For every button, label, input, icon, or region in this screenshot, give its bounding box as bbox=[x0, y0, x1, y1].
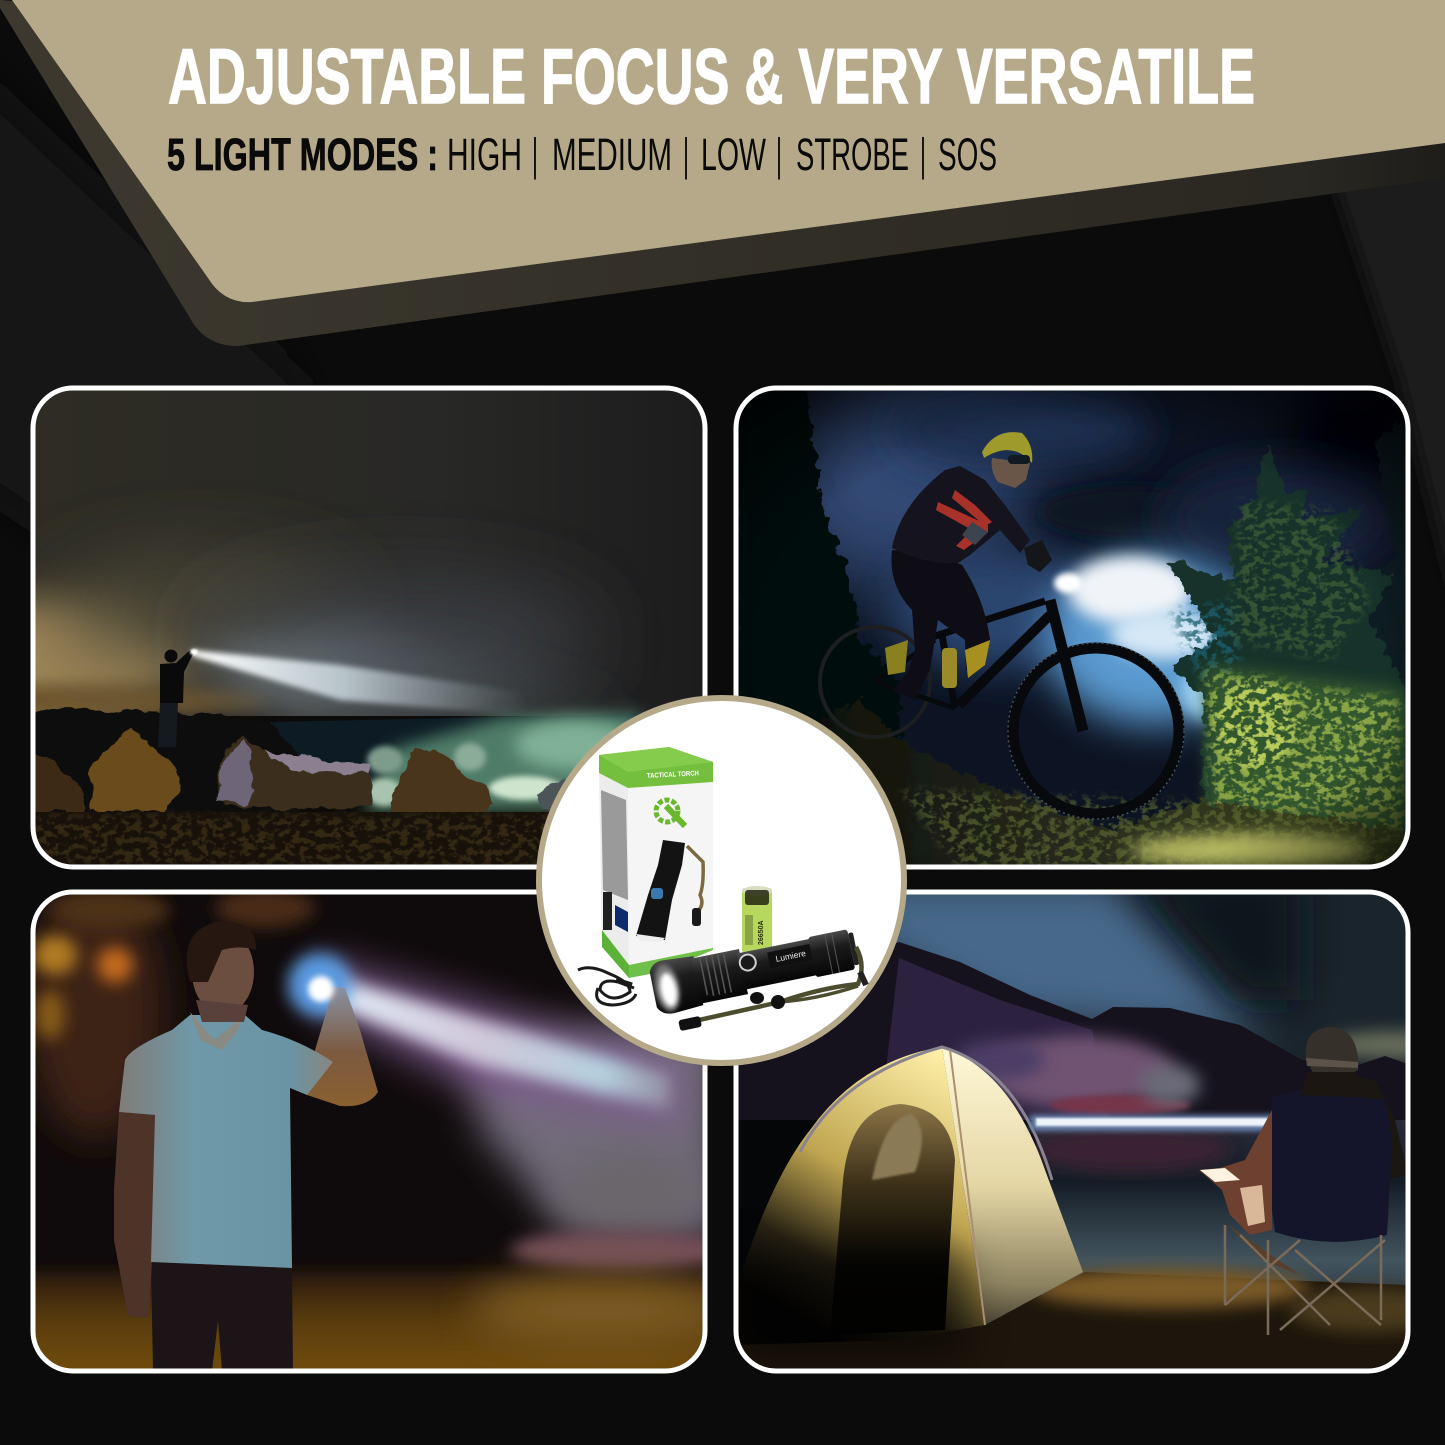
brand name: Lumiere bbox=[775, 948, 807, 964]
header shadow band bbox=[0, 0, 1445, 346]
box printed flashlight bbox=[636, 840, 703, 942]
lanyard bbox=[678, 947, 866, 1031]
panel: cyclist at dusk bbox=[736, 370, 1410, 867]
mode list: MEDIUM bbox=[552, 129, 672, 180]
box side text block bbox=[601, 790, 628, 932]
corner vignette bbox=[736, 388, 1408, 867]
subtitle: light modes: 5 LIGHT MODES : bbox=[167, 129, 438, 180]
mode list: SOS bbox=[938, 129, 997, 180]
sand bbox=[736, 1272, 1408, 1371]
treeline bbox=[36, 706, 298, 756]
right far tree bbox=[1368, 430, 1406, 680]
bright sky glow bbox=[1045, 555, 1265, 725]
fog and beam bbox=[288, 953, 720, 1240]
person in camping chair bbox=[1199, 1027, 1408, 1335]
center product circle bbox=[539, 698, 904, 1063]
bike light bbox=[1054, 573, 1082, 593]
battery: 26650A bbox=[758, 920, 765, 945]
mode list: HIGH bbox=[447, 129, 522, 180]
person silhouette bbox=[158, 650, 193, 747]
mode list: | bbox=[532, 129, 538, 180]
ground bbox=[36, 1266, 702, 1368]
panel frame: top right bbox=[736, 388, 1408, 867]
usb cable bbox=[578, 968, 636, 1005]
box label: TACTICAL TORCH bbox=[647, 770, 699, 780]
right raised arm bbox=[307, 985, 378, 1106]
flashlight lens glow bbox=[651, 962, 684, 1014]
panel frame: top left bbox=[33, 388, 705, 867]
lake bbox=[1036, 1120, 1406, 1295]
cyclist bbox=[885, 432, 1052, 700]
mountains bbox=[736, 942, 1408, 1125]
flashlight bbox=[648, 922, 862, 1016]
mode list: | bbox=[776, 129, 782, 180]
panel frame: bottom right bbox=[736, 892, 1408, 1371]
dark field bbox=[270, 714, 640, 782]
panel: camping tent by the lake bbox=[738, 894, 1406, 1368]
standing man bbox=[114, 921, 378, 1371]
panel: man with flashlight in forest bbox=[36, 894, 702, 1368]
header tan banner bbox=[12, 0, 1445, 302]
battery bbox=[742, 886, 772, 953]
grass bbox=[817, 696, 1404, 864]
light beam bbox=[192, 625, 620, 722]
mode list: | bbox=[683, 129, 689, 180]
mode list: | bbox=[920, 129, 926, 180]
rocks and log bbox=[36, 728, 566, 812]
right spruce tree bbox=[1168, 445, 1408, 860]
bike bbox=[820, 600, 1184, 819]
mode list: STROBE bbox=[796, 129, 909, 180]
mode list bbox=[447, 129, 997, 180]
horizontal beam bbox=[1030, 1115, 1275, 1131]
lit grass bbox=[363, 713, 640, 810]
mode list: LOW bbox=[701, 129, 766, 180]
product box bbox=[599, 747, 713, 978]
tent bbox=[736, 1047, 1083, 1360]
panel: man on field with long beam bbox=[0, 388, 705, 867]
box logo: gear and wrench bbox=[656, 800, 685, 826]
panel frame: bottom left bbox=[33, 892, 705, 1371]
left dark tree bbox=[738, 390, 905, 740]
